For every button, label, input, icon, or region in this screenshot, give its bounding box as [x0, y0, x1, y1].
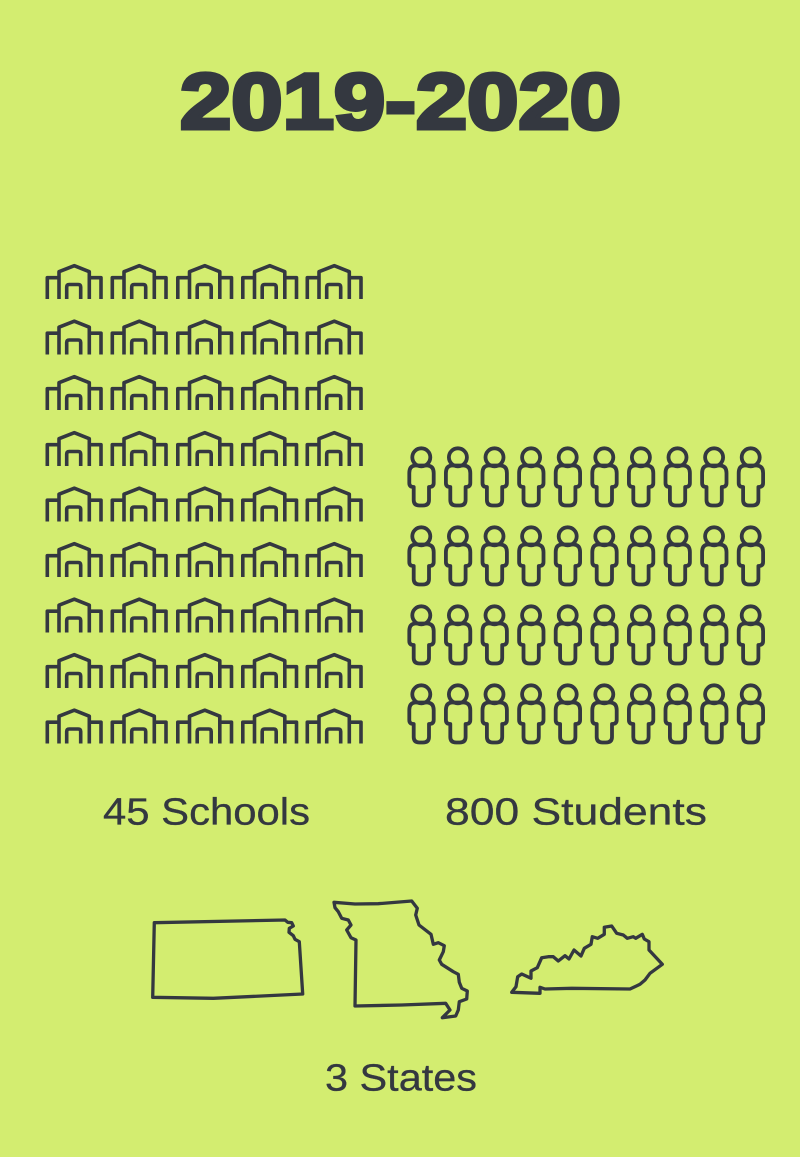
school row 3	[47, 377, 361, 410]
student row 3	[409, 606, 763, 664]
title: 2019-2020	[180, 56, 621, 146]
student row 1	[409, 448, 763, 506]
school row 6	[47, 544, 361, 577]
icon grid: 45 schools	[47, 266, 361, 744]
label: 800 Students: 800 Students	[445, 792, 707, 834]
icon: Kentucky outline	[512, 926, 662, 993]
school row 7	[47, 599, 361, 632]
state outlines	[153, 901, 662, 1018]
icon: Kansas outline	[153, 920, 303, 998]
school row 5	[47, 488, 361, 522]
student row 2	[409, 527, 763, 584]
label: 45 Schools: 45 Schools	[103, 792, 310, 834]
icon: Missouri outline	[334, 901, 467, 1018]
label: 3 States: 3 States	[325, 1058, 477, 1100]
school row 9	[47, 710, 361, 744]
school row 8	[47, 655, 361, 688]
school row 1	[47, 266, 361, 299]
icon grid: 800 students	[409, 448, 763, 742]
school row 2	[47, 321, 361, 354]
school row 4	[47, 433, 361, 466]
student row 4	[409, 685, 763, 742]
